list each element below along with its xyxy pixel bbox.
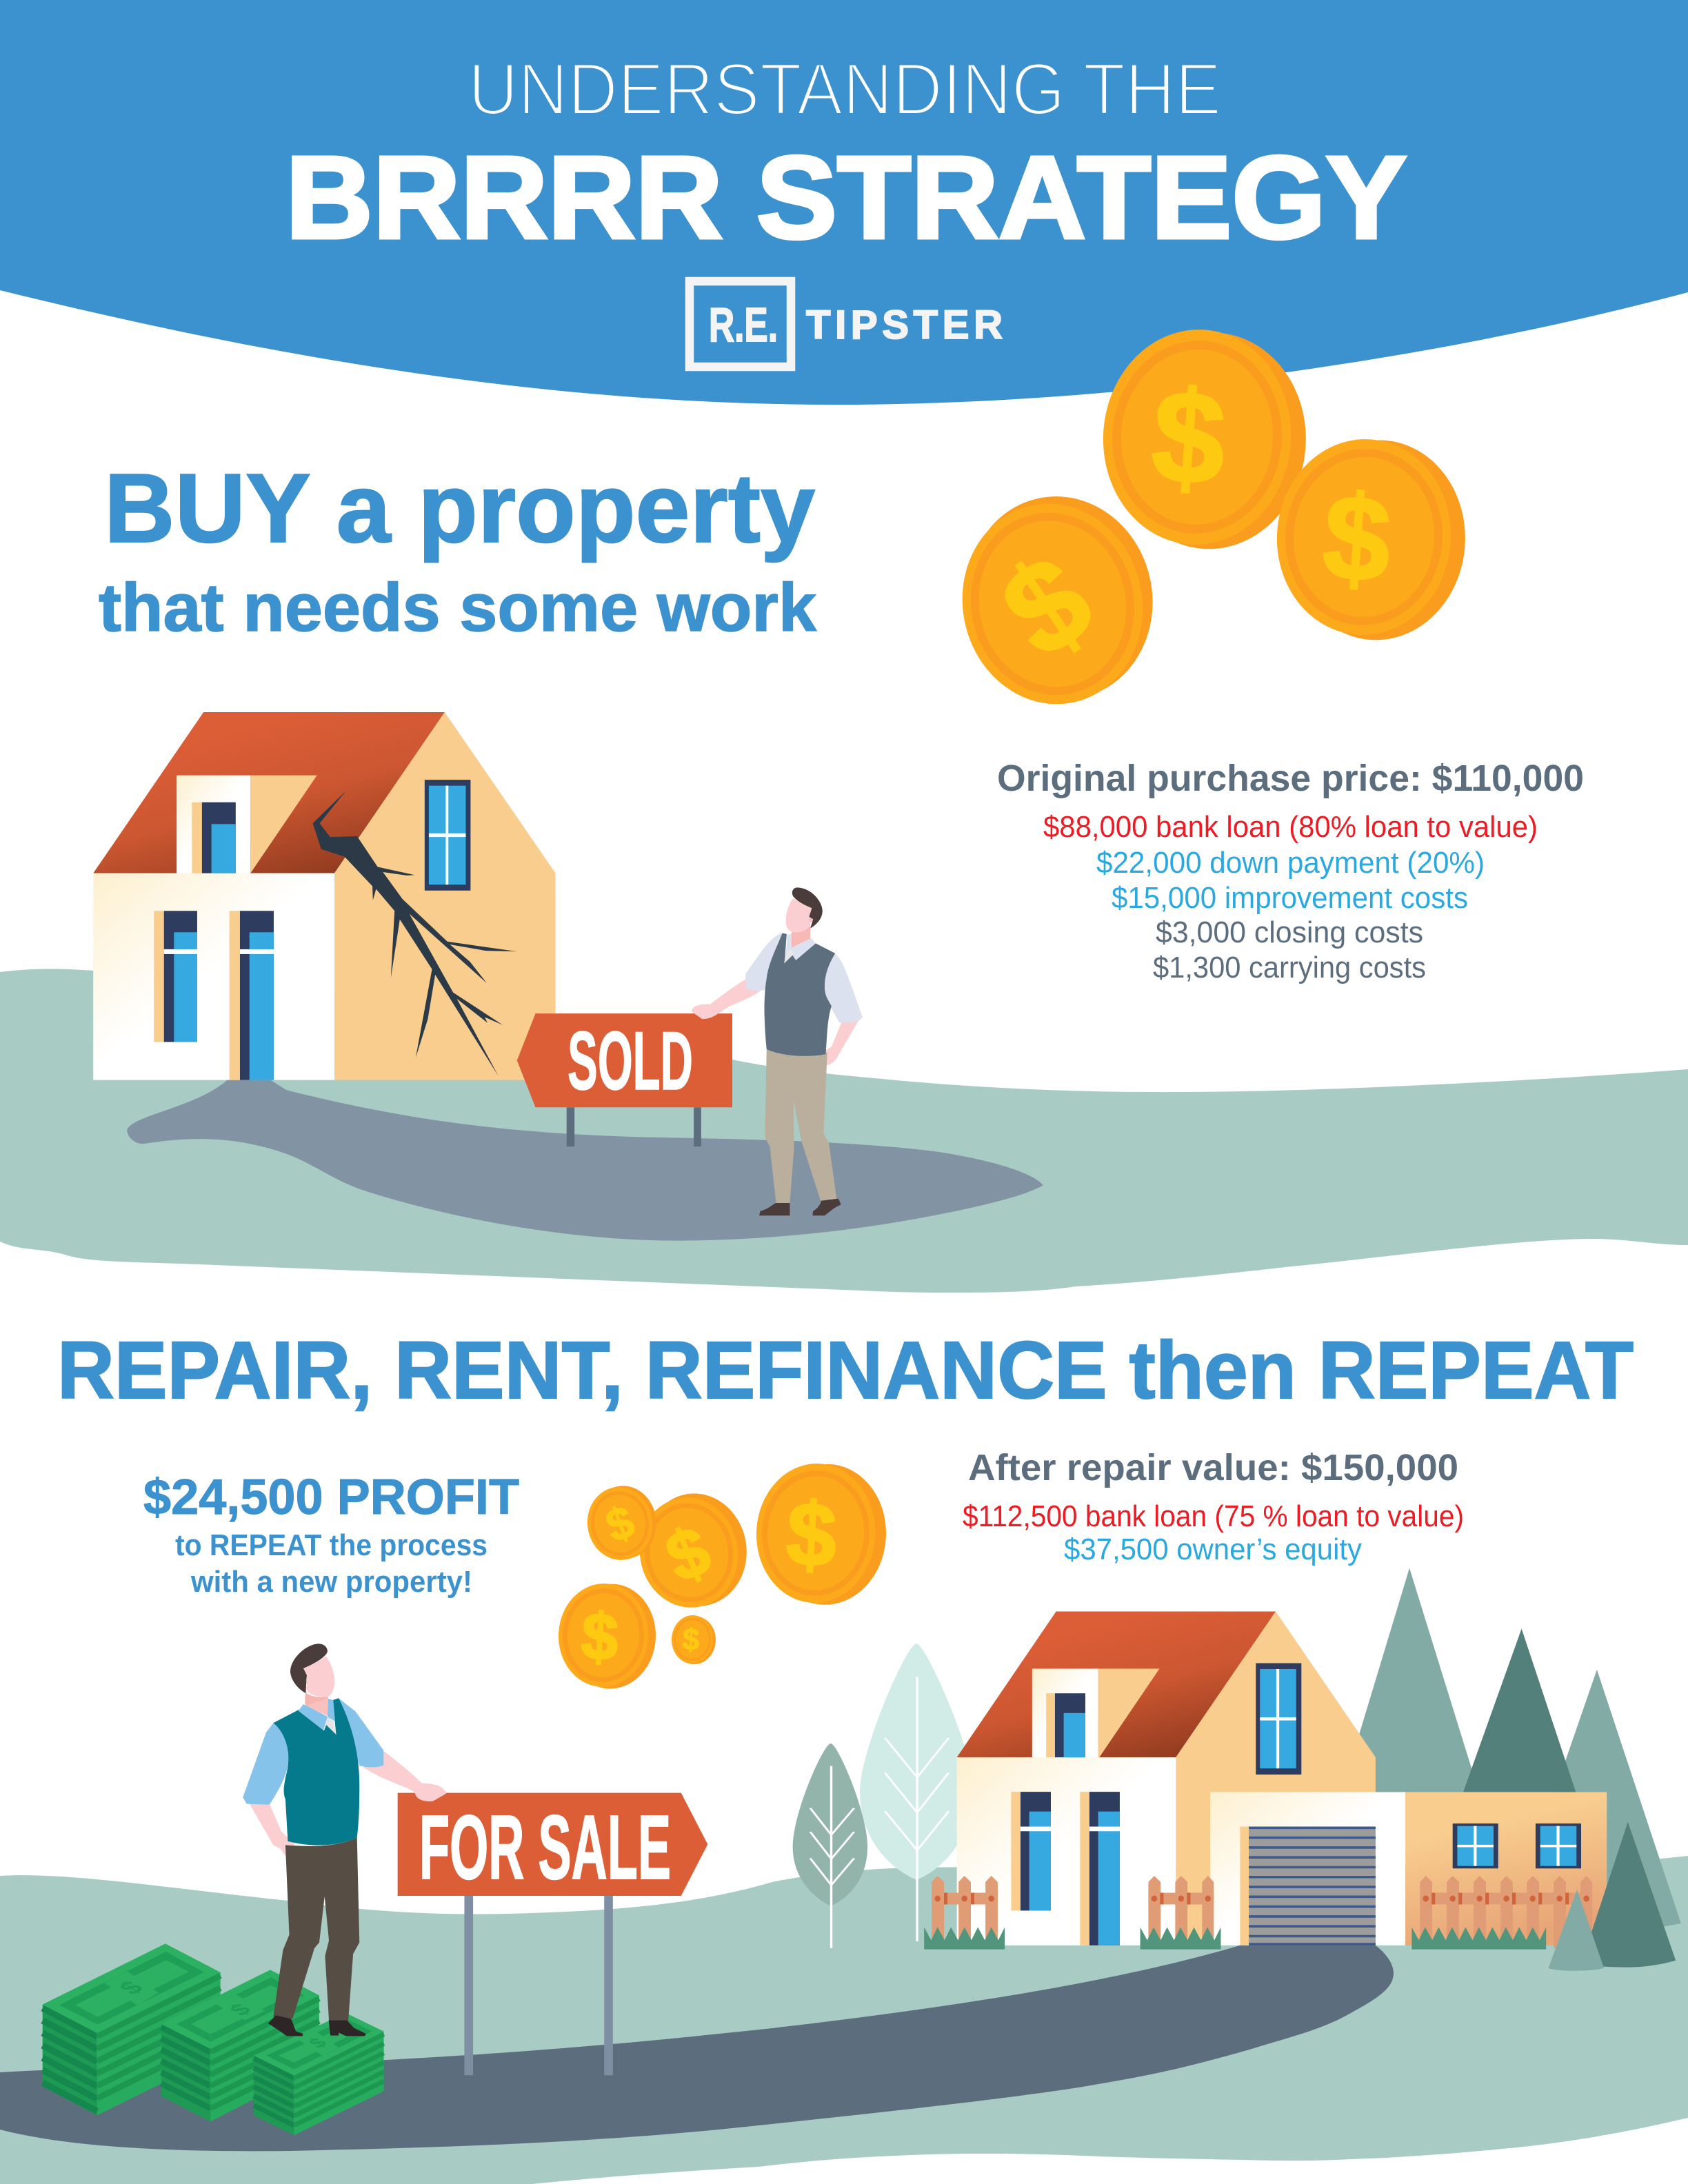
icon: coin medium centre	[630, 1486, 756, 1615]
gable wall	[334, 712, 556, 1080]
logo: R.E. Tipster	[690, 281, 1003, 367]
icon: coin large right: $	[784, 1483, 839, 1586]
sign board: sold	[517, 1013, 732, 1107]
icon: coin small top left: $	[599, 1495, 641, 1552]
icon: coin right: $	[1318, 469, 1395, 608]
gable window	[425, 780, 470, 891]
logo: R.E. Tipster: TIPSTER	[806, 303, 1003, 347]
cash stack: middle	[161, 1970, 319, 2121]
tree: front pine	[1581, 1822, 1676, 1968]
tree: back pine left	[1342, 1568, 1479, 1792]
right scene in zoom-space coordinates	[793, 1568, 1681, 1971]
icon: coin left: $	[978, 528, 1116, 685]
text: closing costs: $3,000 closing costs	[1156, 916, 1423, 949]
extension wall	[1405, 1792, 1607, 1945]
icon: coin small top left	[583, 1482, 661, 1564]
roof	[957, 1612, 1276, 1757]
heading: buy a property: BUY a property	[104, 454, 815, 563]
icon: coin top	[1096, 323, 1313, 556]
tree: small front pine	[1549, 1890, 1604, 1971]
man with teal vest: shoes	[268, 2015, 366, 2036]
sign text: for sale: FOR SALE	[419, 1797, 671, 1898]
text: bank loan: $88,000 bank loan (80% loan to value)	[1043, 810, 1538, 844]
text: to repeat the process: to REPEAT the process	[175, 1528, 488, 1562]
roof	[93, 712, 445, 873]
header band	[0, 0, 1688, 405]
tree: back pine dark	[1463, 1629, 1576, 1792]
icon: coin left	[943, 479, 1172, 721]
icon: coin medium centre: $	[656, 1511, 721, 1597]
text: down payment: $22,000 down payment (20%)	[1096, 846, 1485, 880]
grass left	[924, 1928, 1005, 1950]
icon: coin medium bottom left	[556, 1581, 659, 1691]
gable window	[1256, 1664, 1301, 1775]
top scene in zoom-space coordinates	[93, 712, 1043, 1241]
road: top driveway	[127, 1080, 1043, 1241]
icon: coin large right	[753, 1461, 890, 1608]
cash stack: middle: $	[223, 2000, 257, 2019]
tree: pale leaf tree	[860, 1644, 974, 1941]
fence middle	[1148, 1876, 1214, 1948]
grass middle	[1141, 1928, 1220, 1950]
text: profit: $24,500 PROFIT	[143, 1470, 519, 1525]
tree: back pine right	[1531, 1670, 1681, 1936]
text: with a new property: with a new property!	[190, 1565, 472, 1599]
ground floor window	[154, 911, 197, 1042]
cash stack: front: $	[304, 2034, 332, 2051]
cash stack: left	[43, 1943, 221, 2115]
dormer	[1032, 1669, 1160, 1757]
icon: coin tiny: $	[681, 1622, 700, 1657]
icon: coin top: $	[1147, 363, 1230, 514]
garage door	[1240, 1827, 1376, 1945]
cash stack: front	[254, 2013, 384, 2135]
garage wall	[1210, 1792, 1405, 1945]
title: understanding the: UNDERSTANDING THE	[468, 48, 1221, 130]
extension window left	[1453, 1823, 1498, 1868]
icon: coin right	[1270, 434, 1472, 646]
extension window right	[1536, 1823, 1581, 1868]
cash stack: left: $	[112, 1977, 149, 1999]
sign board: for sale	[398, 1793, 707, 1896]
text: refinanced loan: $112,500 bank loan (75 % loan to value)	[963, 1499, 1464, 1533]
cash stacks in zoom-space coordinates	[43, 1943, 384, 2135]
icon: coin tiny	[670, 1614, 717, 1666]
sign posts: sold	[567, 1107, 701, 1146]
subheading: that needs some work: that needs some work	[99, 569, 816, 645]
front door	[1080, 1792, 1120, 1945]
text: owner's equity: $37,500 owner’s equity	[1064, 1533, 1362, 1566]
text: original purchase price: Original purchase price: $110,000	[997, 758, 1584, 799]
title: BRRRR strategy: BRRRR STRATEGY	[285, 132, 1407, 263]
white wall	[957, 1757, 1176, 1945]
sign text: sold: SOLD	[567, 1015, 693, 1107]
grass right	[1411, 1928, 1546, 1950]
man with teal vest: body	[243, 1698, 446, 2021]
ground floor window	[1011, 1792, 1051, 1910]
landscape: bottom hill	[0, 1856, 1688, 2184]
front door	[230, 911, 274, 1080]
road: bottom driveway	[0, 1945, 1394, 2151]
fence left	[932, 1876, 998, 1948]
gable wall	[1176, 1612, 1376, 1945]
fence right	[1420, 1876, 1592, 1948]
dormer	[177, 776, 317, 873]
tree: small leaf tree	[793, 1743, 867, 1948]
house: fixer-upper	[93, 712, 556, 1080]
sign posts: for sale	[464, 1896, 613, 2075]
for-sale sign in zoom-space coordinates	[398, 1793, 707, 2075]
text: carrying costs: $1,300 carrying costs	[1153, 951, 1426, 984]
text: after repair value: After repair value: $150,000	[968, 1447, 1458, 1488]
white wall	[93, 873, 334, 1080]
heading: repair rent refinance repeat: REPAIR, RENT, REFINANCE then REPEAT	[57, 1325, 1634, 1416]
house: repaired	[957, 1612, 1607, 1945]
man with teal vest: head and collar	[290, 1644, 336, 1735]
wall crack	[313, 791, 516, 1076]
text: improvement costs: $15,000 improvement costs	[1112, 881, 1468, 915]
landscape: top hill	[0, 969, 1688, 1293]
man with grey vest: body	[692, 933, 863, 1215]
icon: coin medium bottom left: $	[580, 1599, 620, 1675]
man with grey vest: head and collar	[784, 887, 823, 963]
logo: R.E. Tipster: R.E.	[709, 298, 778, 352]
